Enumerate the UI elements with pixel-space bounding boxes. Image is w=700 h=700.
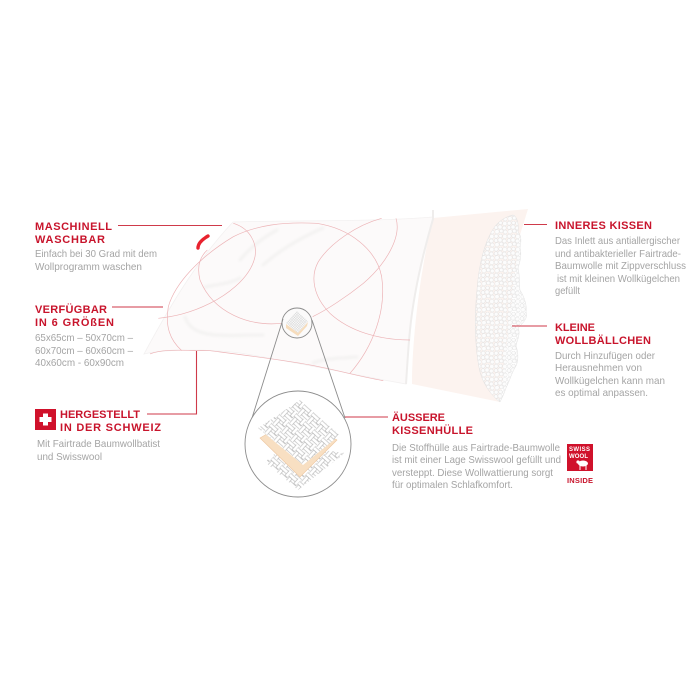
callout: kleine wollbällchen: Durch Hinzufügen oder [555, 350, 655, 362]
icon: swisswool inside logo [567, 444, 593, 485]
inner pillow [412, 209, 528, 402]
callout: verfügbar in 6 größen [35, 303, 163, 369]
callout: äussere kissenhülle: für optimalen Schlafkomfort. [392, 479, 513, 491]
icon: swisswool inside logo: SWISS [569, 447, 590, 453]
icon: swisswool inside logo: INSIDE [567, 476, 593, 485]
magnifier lines [252, 319, 345, 418]
wool layer [260, 415, 337, 477]
icon: swiss flag [35, 409, 56, 430]
cover seam [406, 210, 433, 384]
callout: hergestellt in der schweiz: und Swisswool [37, 451, 102, 463]
callout: kleine wollbällchen: KLEINE [555, 322, 595, 334]
callout: hergestellt in der schweiz: HERGESTELLT [60, 409, 140, 421]
callout: äussere kissenhülle: Die Stoffhülle aus Fairtrade-Baumwolle [392, 442, 560, 454]
callout: kleine wollbällchen: es optimal anpassen. [555, 387, 648, 399]
callout: maschinell waschbar: MASCHINELL [35, 221, 112, 233]
callout: verfügbar in 6 größen: 65x65cm – 50x70cm – [35, 332, 133, 344]
magnifier small circle [282, 308, 312, 338]
callout: kleine wollbällchen: WOLLBÄLLCHEN [555, 334, 651, 347]
callout: innere kissen: INNERES KISSEN [555, 220, 652, 232]
callout: kleine wollbällchen: Herausnehmen von [555, 362, 642, 374]
wool balls [475, 215, 527, 402]
callout: äussere kissenhülle: KISSENHÜLLE [392, 424, 473, 437]
callout: innere kissen: und antibakterieller Fairtrade- [555, 248, 681, 260]
quilting lines [150, 218, 410, 381]
callout: maschinell waschbar: WASCHBAR [35, 234, 105, 246]
callout: innere kissen: Baumwolle mit Zippverschluss [555, 260, 686, 272]
callout: äussere kissenhülle [345, 411, 561, 491]
callout: hergestellt in der schweiz: Mit Fairtrade Baumwollbatist [37, 438, 160, 450]
upper weave layer [258, 400, 340, 465]
cover wrinkles [185, 228, 357, 363]
callout: verfügbar in 6 größen: IN 6 GRÖßEN [35, 316, 114, 329]
callout: maschinell waschbar: Einfach bei 30 Grad mit dem [35, 248, 157, 260]
callout: innere kissen: ist mit kleinen Wollkügelchen [557, 273, 680, 285]
callout: innere kissen [524, 220, 686, 297]
callout: maschinell waschbar: Wollprogramm waschen [35, 261, 142, 273]
red tag [198, 236, 208, 248]
callout: verfügbar in 6 größen: VERFÜGBAR [35, 303, 107, 316]
callout: verfügbar in 6 größen: 60x70cm – 60x60cm – [35, 345, 133, 357]
callout: innere kissen: Das Inlett aus antiallergischer [555, 235, 680, 247]
callout: äussere kissenhülle: ist mit einer Lage Swisswool gefüllt und [392, 454, 561, 466]
callout: äussere kissenhülle: ÄUSSERE [392, 411, 445, 424]
lower weave layer [265, 445, 345, 490]
callout: hergestellt in der schweiz: IN DER SCHWEIZ [60, 422, 161, 434]
callout: verfügbar in 6 größen: 40x60cm - 60x90cm [35, 357, 124, 369]
callout: äussere kissenhülle: versteppt. Diese Wollwattierung sorgt [392, 467, 553, 479]
outer cover [144, 217, 433, 384]
callout: kleine wollbällchen: Wollkügelchen kann man [555, 375, 665, 387]
callout: kleine wollbällchen [512, 322, 665, 399]
magnified fabric [245, 391, 351, 497]
callout: maschinell waschbar [35, 221, 222, 273]
icon: swisswool inside logo: WOOL [569, 454, 588, 460]
pillow illustration [144, 209, 528, 497]
callout: hergestellt in der schweiz [35, 351, 196, 463]
callout: innere kissen: gefüllt [555, 285, 580, 297]
